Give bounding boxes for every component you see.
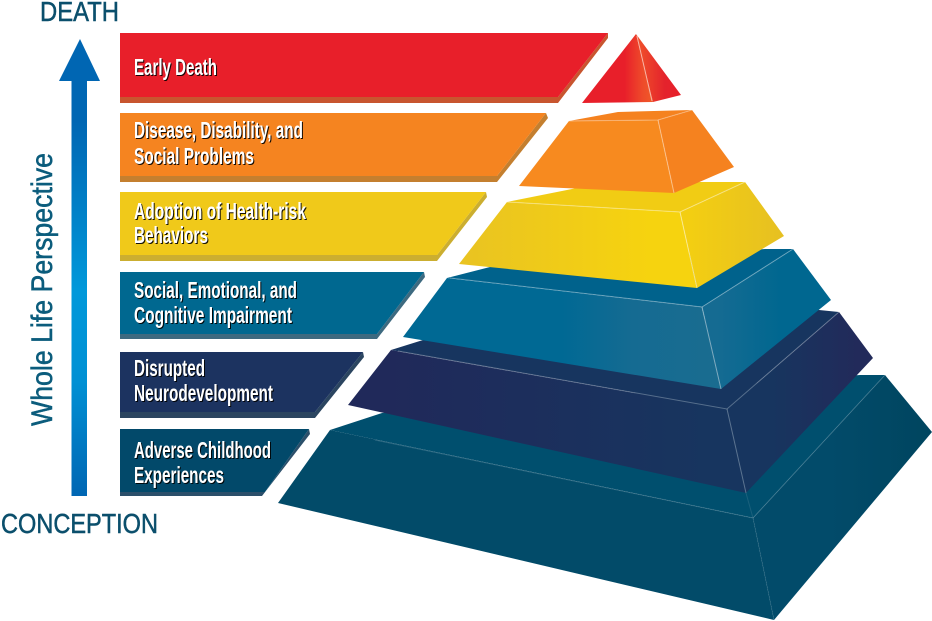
label: CONCEPTION: CONCEPTION [1,508,158,539]
tier: Adoption of Health-risk Behaviors [459,182,784,288]
banner: Early Death: Early Death [134,54,217,80]
banner: Disease, Disability, and Social Problems: Social Problems [134,143,254,169]
axis label: Whole Life Perspective: Whole Life Perspective [26,153,59,426]
banner: Early Death [120,33,608,103]
banner: Disease, Disability, and Social Problems: Disease, Disability, and [134,117,303,143]
banner: Adverse Childhood Experiences [120,429,310,496]
banner: Adverse Childhood Experiences: Experiences [134,462,224,488]
tier: Disease, Disability, and Social Problems [519,110,734,193]
banner: Disrupted Neurodevelopment [120,352,364,418]
tier: Early Death peak [582,34,681,103]
pyramid [278,34,932,620]
banner: Social, Emotional, and Cognitive Impairment: Social, Emotional, and [134,277,297,303]
arrow: upward whole-life arrow [59,39,100,496]
tier: Adverse Childhood Experiences [278,375,932,620]
banner: Adverse Childhood Experiences: Adverse Childhood [134,437,271,463]
banner: Disease, Disability, and Social Problems [120,113,548,182]
banner: Social, Emotional, and Cognitive Impairment: Cognitive Impairment [134,302,292,328]
banner: Social, Emotional, and Cognitive Impairment [120,272,425,339]
banner: Adoption of Health-risk Behaviors [120,192,487,261]
banner: Adoption of Health-risk Behaviors: Adoption of Health-risk [134,198,306,224]
banner: Disrupted Neurodevelopment: Disrupted [134,355,205,381]
banner: Adoption of Health-risk Behaviors: Behaviors [134,222,208,248]
tier: Disrupted Neurodevelopment [348,310,873,493]
tier: Social, Emotional, and Cognitive Impairment [403,249,831,389]
banner: Disrupted Neurodevelopment: Neurodevelopment [134,380,273,406]
